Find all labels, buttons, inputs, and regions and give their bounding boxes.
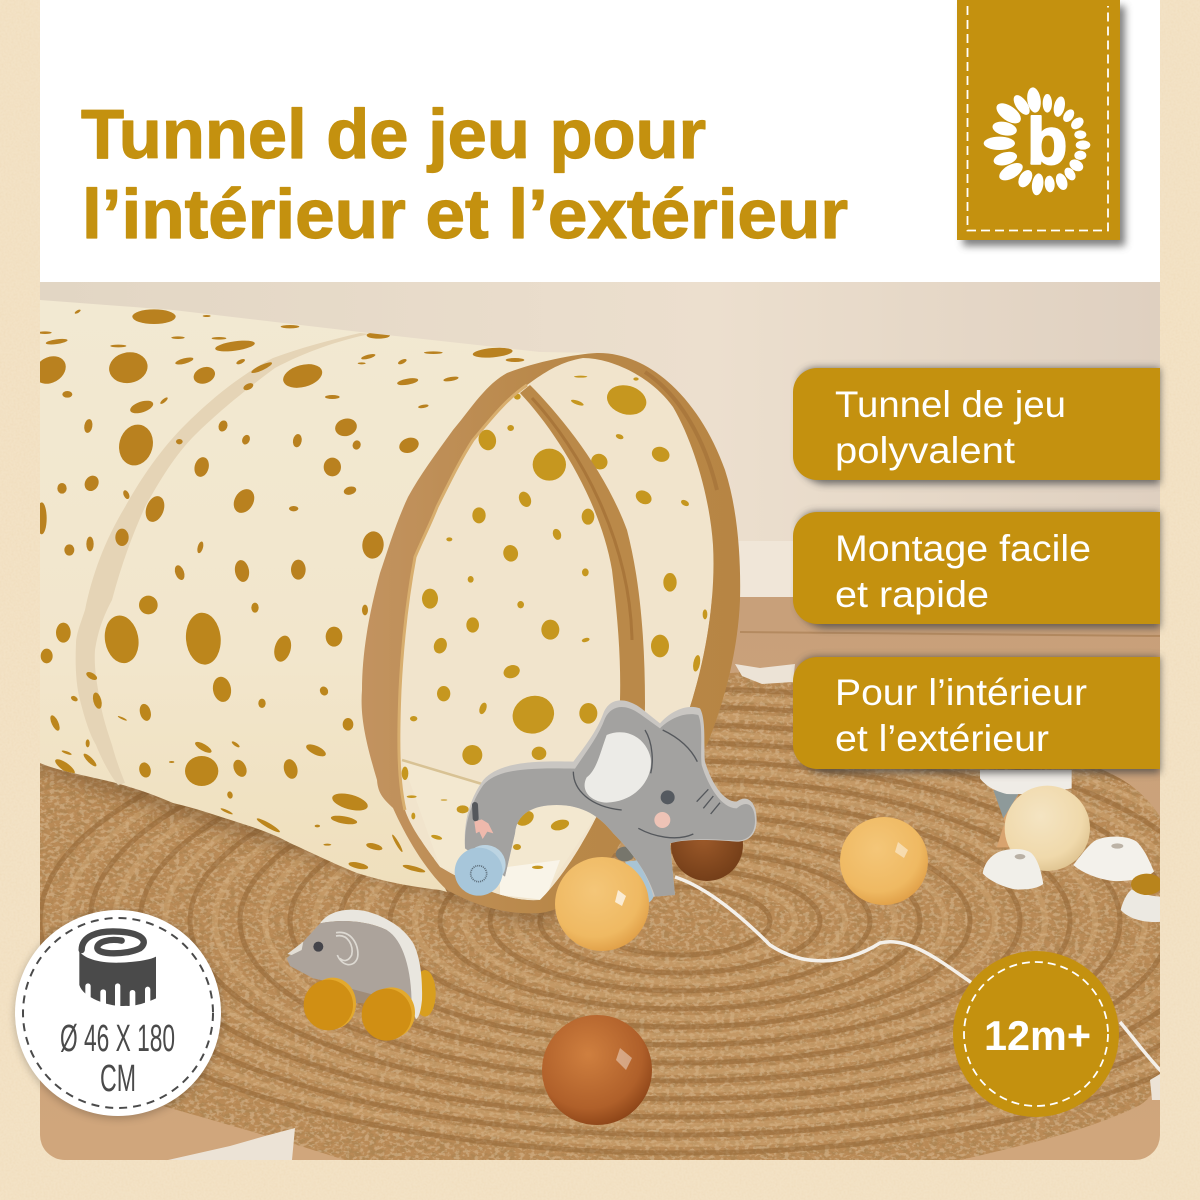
ear [336,932,358,965]
red ball [542,1015,652,1125]
size text: Ø 46 X 180 [60,1018,175,1060]
cheek [654,812,670,828]
callout: montage facile: et rapide [835,574,989,615]
yellow ball front [555,857,649,951]
front wheel face [455,848,503,896]
wall [40,282,1160,541]
callout: tunnel polyvalent: polyvalent [835,430,1016,471]
icon: sunflower logo: b [1027,104,1067,178]
front wheel rim [474,845,506,876]
hoop inner edge [399,385,527,810]
tunnel seam band [76,333,370,785]
toy cup cone [993,790,1019,818]
axle [350,987,373,1003]
eye [313,942,323,952]
title [81,95,848,253]
size text: CM [100,1058,136,1100]
toy small peg [1121,874,1163,922]
header panel [40,0,1160,283]
callout: montage facile [793,512,1160,628]
baseboard [738,541,793,597]
interior spots [410,376,707,765]
elephant toy [455,700,757,903]
toy cup base [993,790,1018,847]
toy ring right [1073,837,1154,881]
tunnel outer fabric [40,300,597,892]
tunnel shadow on rug [40,763,558,930]
callout: interieur exterieur: Pour l’intérieur [835,672,1087,713]
tail [472,802,479,822]
interior lower spots [402,767,570,869]
pull string [675,877,1162,1072]
back hoop [520,385,645,712]
wooden floor [40,597,1160,1160]
jute rug [40,672,1160,1160]
wheel logo [471,866,487,882]
line details [573,730,720,838]
tunnel interior [402,376,714,900]
callout: tunnel polyvalent [793,368,1160,484]
floor plank lines [740,632,1160,636]
brown ball behind elephant [671,840,743,881]
white floor strip [500,860,560,900]
nose top [287,942,303,955]
age badge: 12m+ [984,1012,1091,1059]
body face [465,707,755,897]
icon: sunflower logo [984,87,1090,196]
lower exterior spots [41,596,426,874]
exterior spots [29,309,524,874]
far wheel [625,860,656,903]
tail tuft [474,819,493,839]
callout: montage facile: Montage facile [835,528,1091,569]
cream ball [1005,786,1090,871]
title: l’intérieur et l’extérieur [82,175,848,253]
ear [585,732,651,803]
body edge [465,700,757,897]
upper right exterior spots [418,346,524,409]
side [287,921,412,1005]
yellow ball right [840,817,928,905]
interior floor fold [402,760,600,900]
brand tag [957,0,1125,246]
icon: measuring tape [79,931,156,1010]
front hoop [362,353,740,913]
callout: interieur exterieur [793,657,1160,773]
size badge [14,910,222,1119]
hoop crease [532,398,632,640]
right wheel [362,987,415,1041]
photo scene [0,282,1200,1180]
title: Tunnel de jeu pour [81,95,706,173]
callout: tunnel polyvalent: Tunnel de jeu [835,384,1066,425]
tunnel [29,300,740,920]
top edge [320,910,422,1019]
left wheel [304,978,356,1030]
far wheel axle [616,847,634,861]
rug tassels [168,664,1160,1160]
mole toy [287,910,436,1041]
hoop right shading [645,372,717,490]
toy cup [980,770,1072,794]
callout: interieur exterieur: et l’extérieur [835,718,1049,759]
stacking toys [980,770,1163,922]
upper exterior spots [29,309,421,583]
back wheel [414,970,436,1017]
toy ring left [983,849,1043,889]
eye [661,790,675,804]
age badge [953,951,1119,1117]
